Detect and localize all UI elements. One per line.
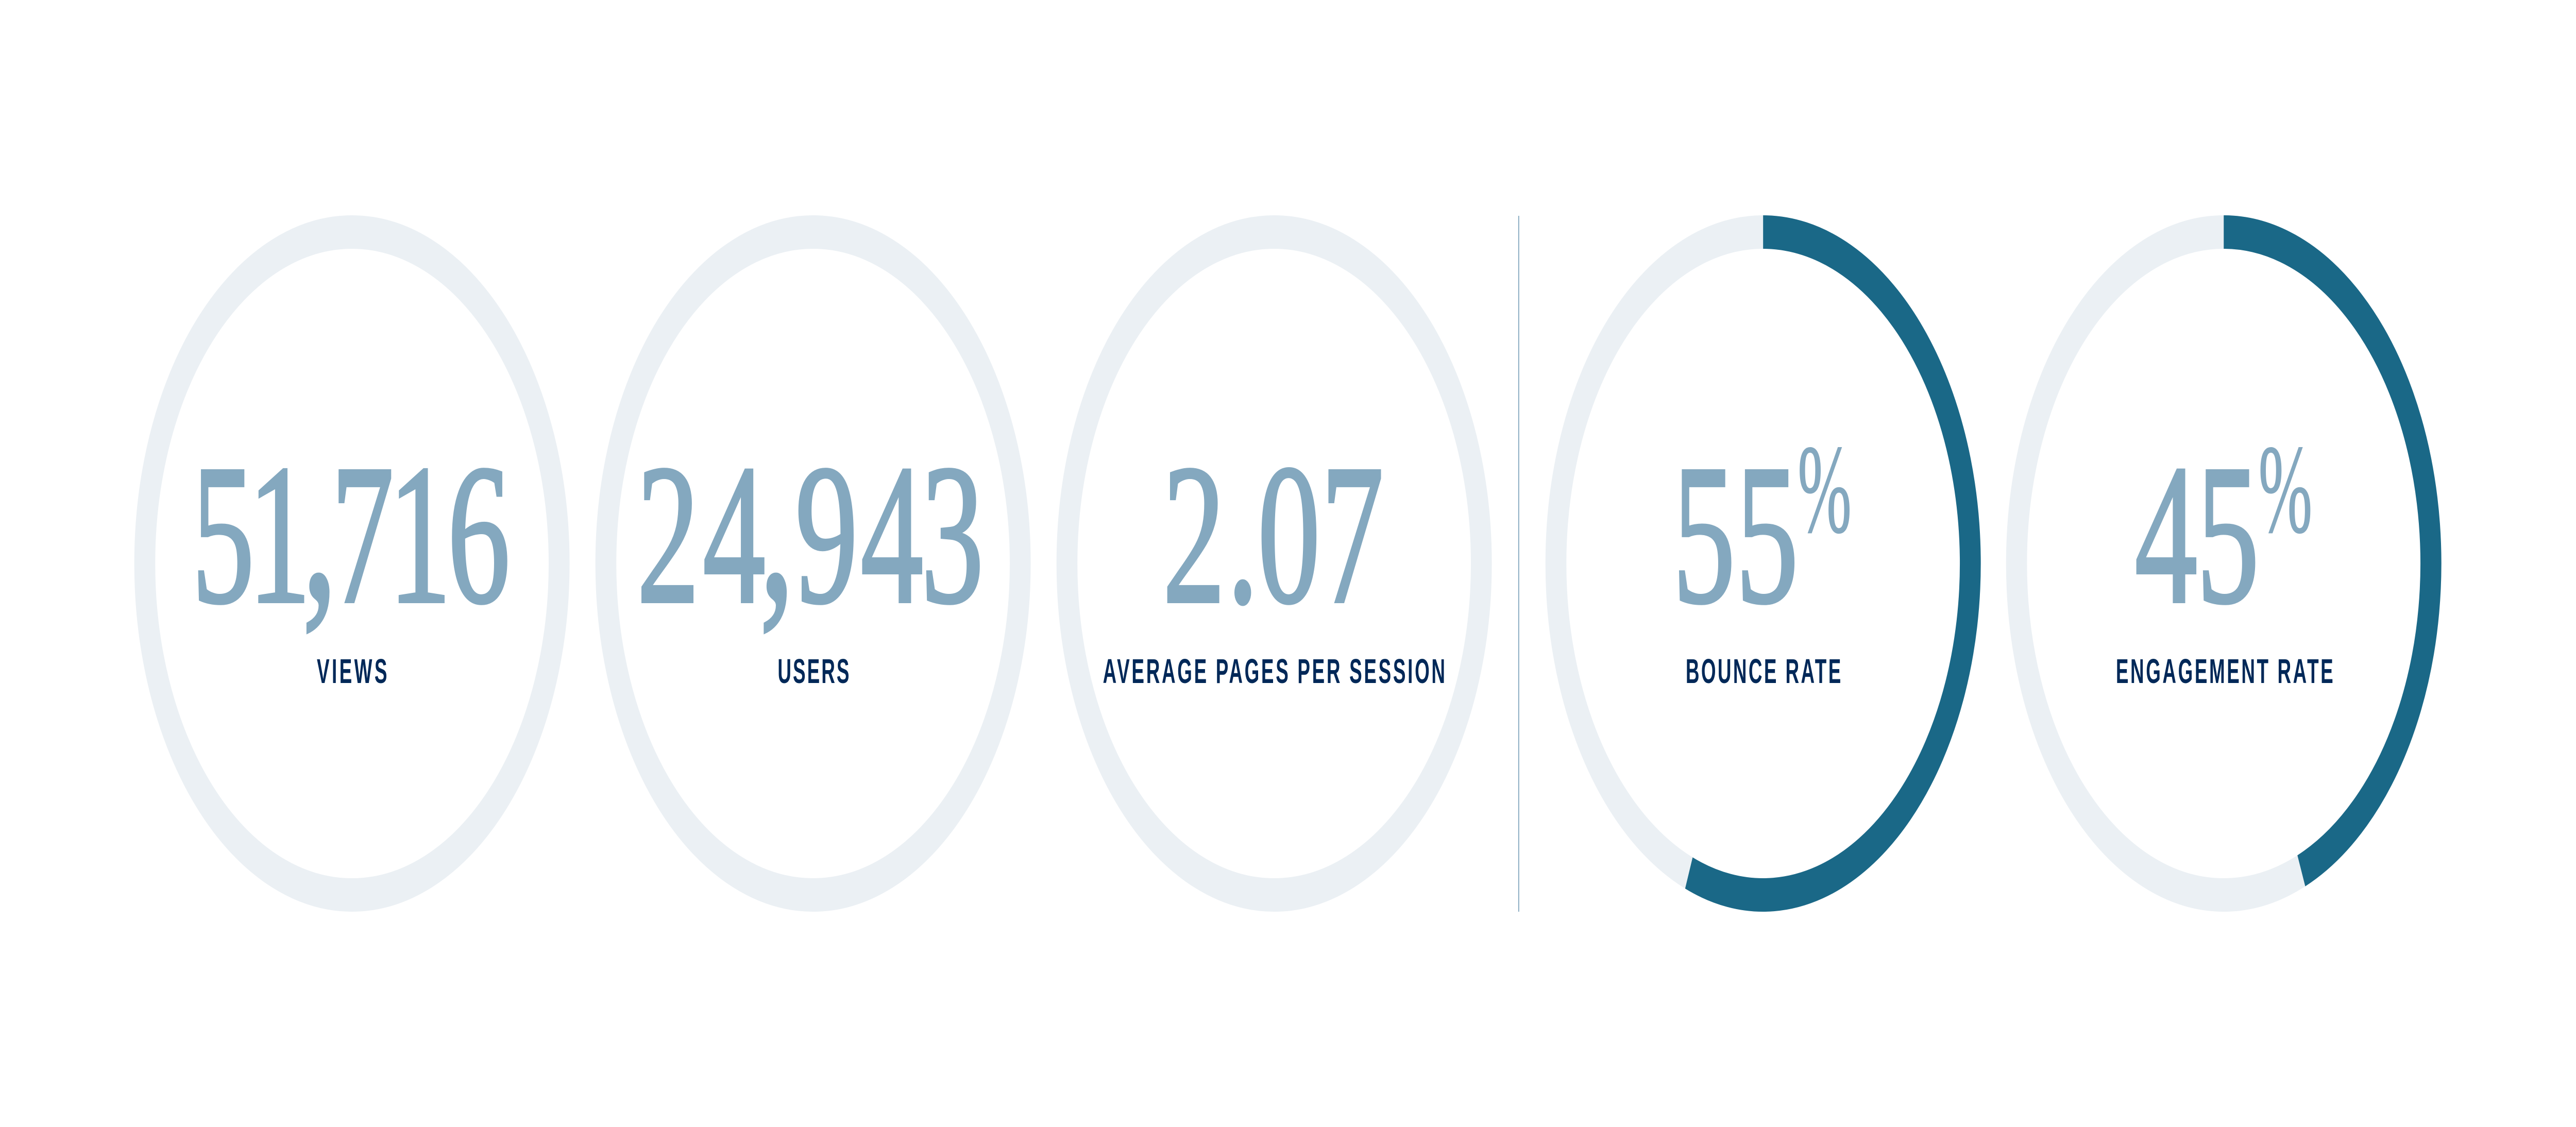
panel: views xyxy=(145,232,559,895)
panel: average pages per session xyxy=(1067,232,1481,895)
label: pages per session: AVERAGE PAGES PER SESSION xyxy=(1103,653,1445,691)
label: views: VIEWS xyxy=(317,653,387,691)
ring: pages per session xyxy=(1067,232,1481,895)
ring: bounce rate track xyxy=(1556,232,1970,895)
ring: views xyxy=(145,232,559,895)
number: users: , xyxy=(759,396,795,647)
number: pages per session: 2.07 xyxy=(1163,424,1384,645)
percent sign: engagement rate: % xyxy=(2259,420,2312,559)
panel: bounce rate xyxy=(1556,232,1970,895)
panel: engagement rate xyxy=(2016,232,2431,895)
arc: bounce rate 55% xyxy=(1689,232,1970,895)
label: engagement rate: ENGAGEMENT RATE xyxy=(2116,653,2333,691)
percent sign: bounce rate: % xyxy=(1798,420,1852,559)
number: engagement rate: 45 xyxy=(2135,424,2259,645)
ring: engagement rate track xyxy=(2016,232,2431,895)
divider line xyxy=(1518,216,1519,912)
number: views: 716 xyxy=(331,424,510,645)
label: bounce rate: BOUNCE RATE xyxy=(1686,653,1841,691)
ring: users xyxy=(606,232,1020,895)
number: views: , xyxy=(302,396,337,647)
panel: users xyxy=(606,232,1020,895)
arc: engagement rate 45% xyxy=(2224,232,2431,871)
label: users: USERS xyxy=(777,653,850,691)
number: views: 51 xyxy=(192,424,311,645)
number: bounce rate: 55 xyxy=(1673,424,1799,645)
number: users: 24 xyxy=(637,424,766,645)
number: users: 943 xyxy=(795,424,984,645)
